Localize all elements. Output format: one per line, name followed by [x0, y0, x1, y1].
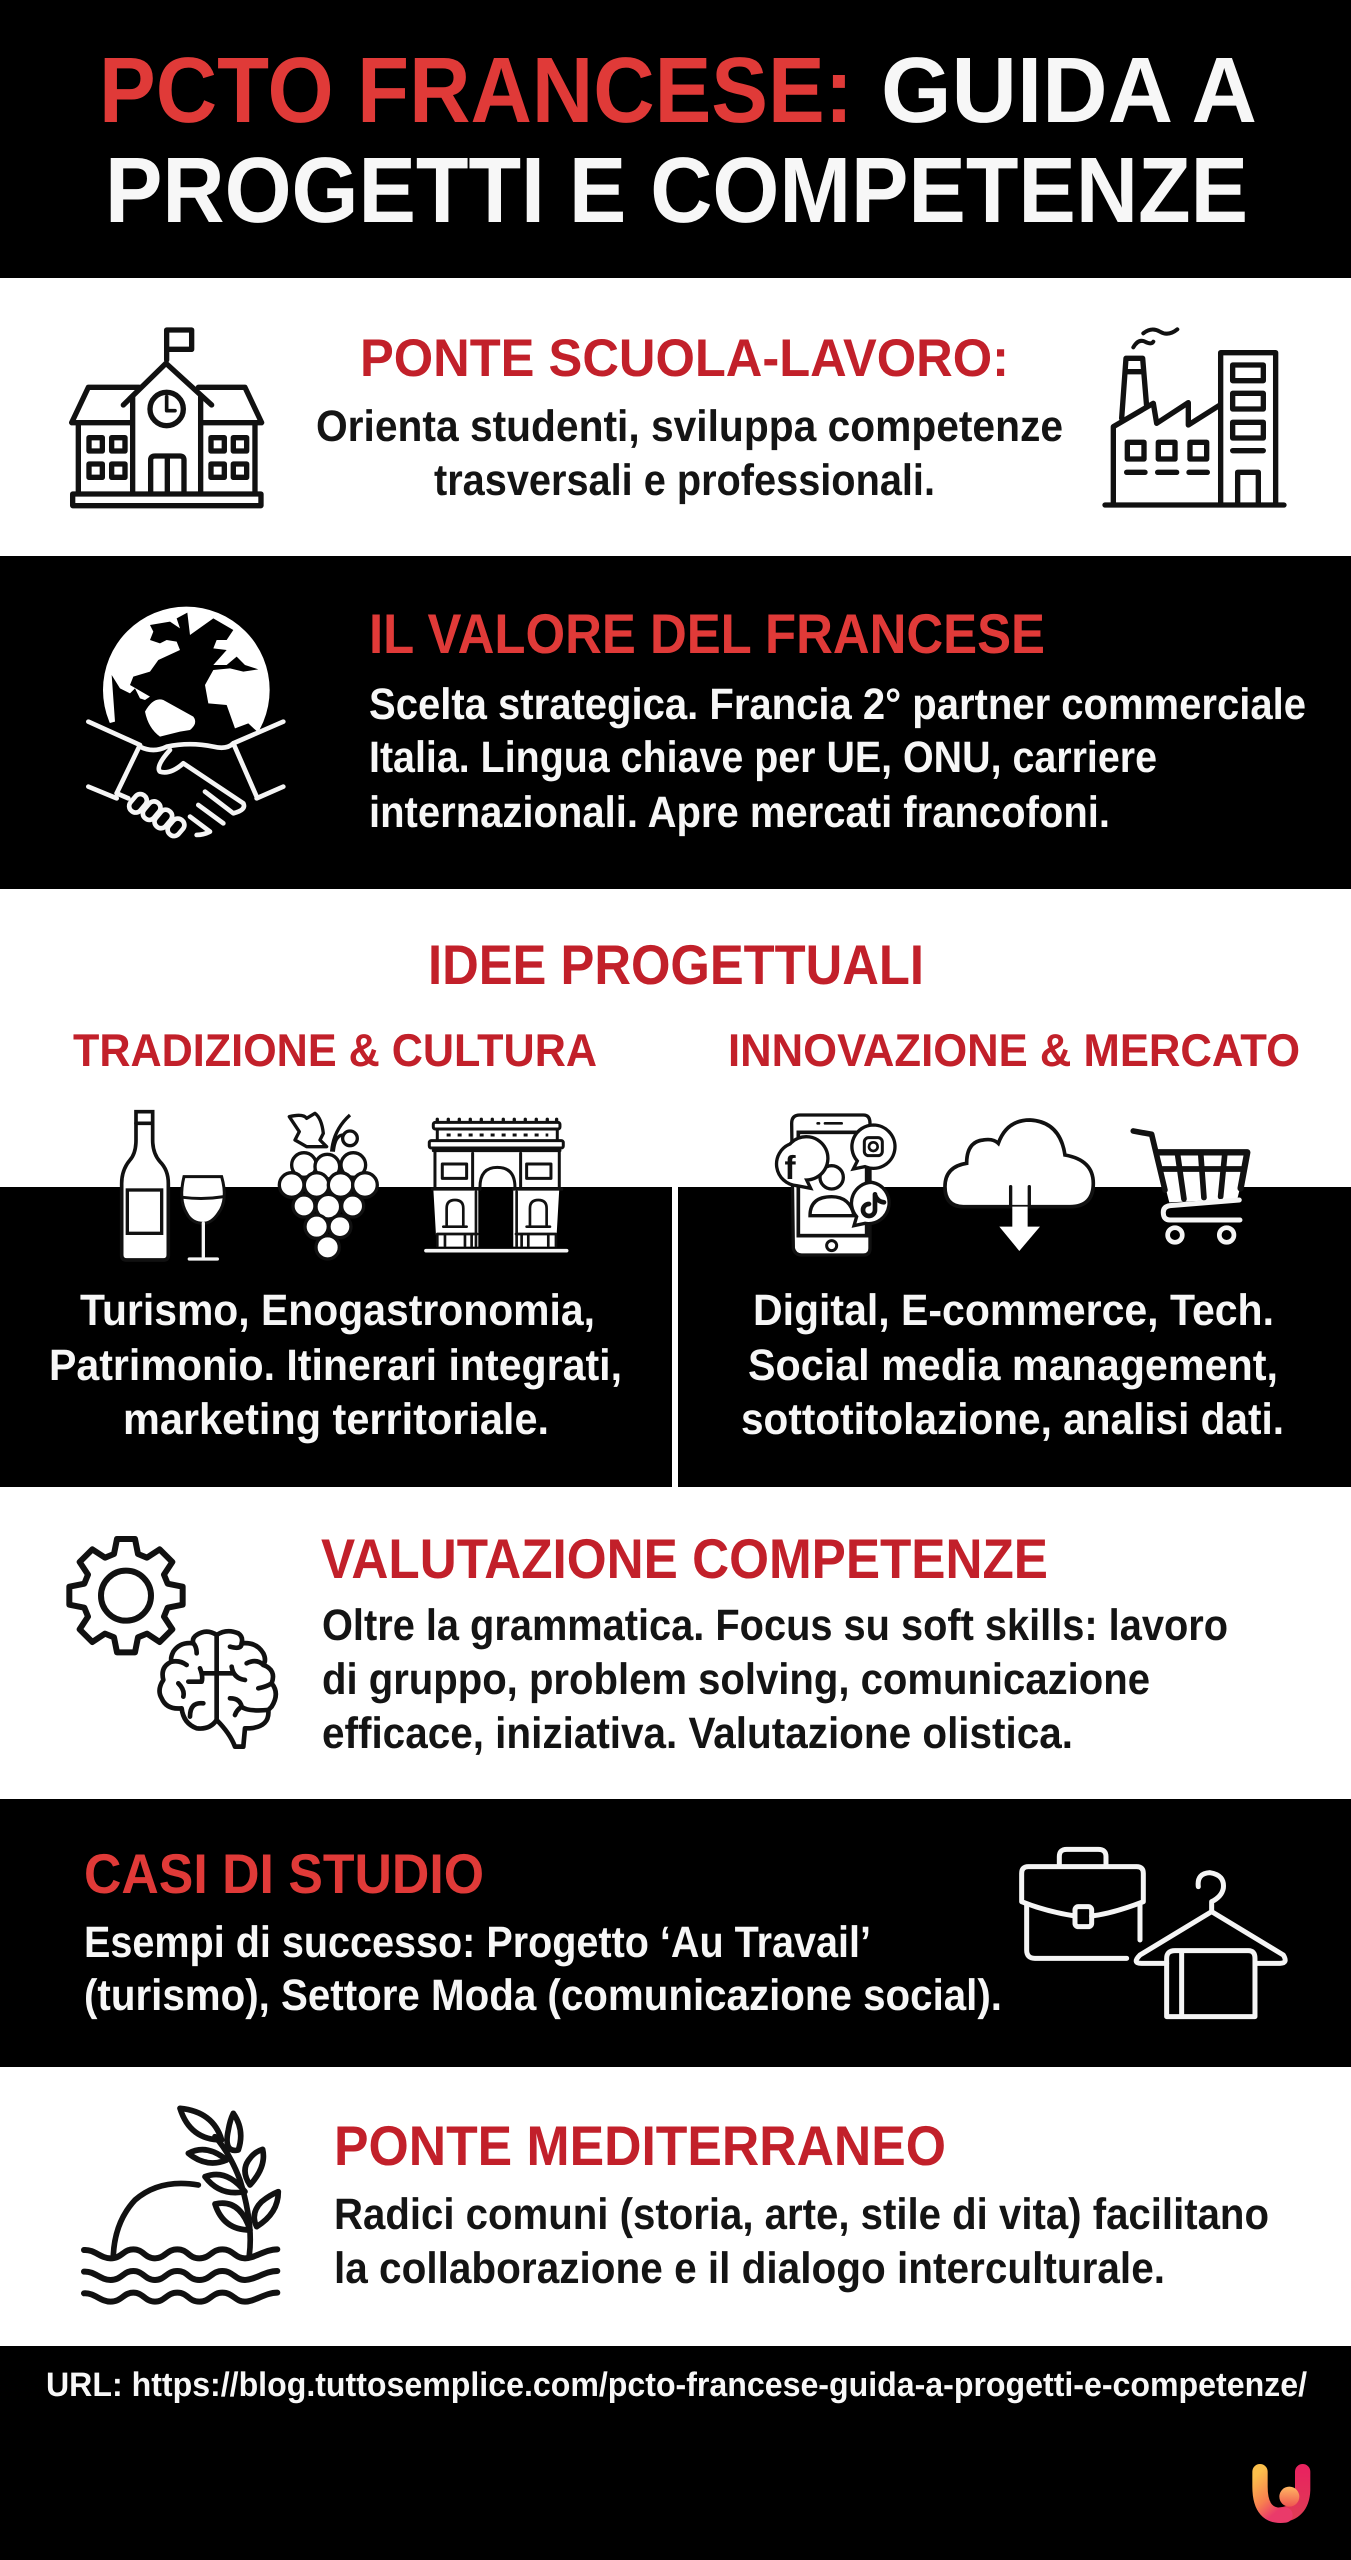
heading: il valore del francese: IL VALORE DEL FRANCESE [369, 602, 1045, 665]
icon: grapes [279, 1113, 377, 1259]
text: valutazione body: Oltre la grammatica. Focus su soft skills: lavoro [322, 1601, 1228, 1650]
text: innovazione body: Social media management, [748, 1341, 1278, 1390]
text: valutazione body [322, 1601, 1228, 1758]
subheading: tradizione e cultura: TRADIZIONE & CULTURA [73, 1024, 597, 1076]
heading: ponte mediterraneo: PONTE MEDITERRANEO [334, 2114, 946, 2177]
text: ponte body: trasversali e professionali. [434, 456, 935, 505]
icon: sun, olive branch and waves [84, 2108, 278, 2302]
icon: gear and brain [69, 1539, 276, 1747]
text: tradizione body: marketing territoriale. [123, 1395, 549, 1444]
panel: ponte scuola-lavoro [0, 278, 1351, 556]
text: ponte body: Orienta studenti, sviluppa competenze [316, 402, 1063, 451]
icon: school [72, 330, 262, 506]
text: mediterraneo body [334, 2190, 1269, 2293]
icon: phone with social bubbles [777, 1115, 895, 1255]
heading: valutazione competenze: VALUTAZIONE COMPETENZE [321, 1527, 1048, 1590]
text: ponte body [316, 402, 1063, 505]
subheading: innovazione e mercato: INNOVAZIONE & MERCATO [728, 1024, 1300, 1076]
text: innovazione body: Digital, E-commerce, Tech. [753, 1286, 1274, 1335]
panel: idee progettuali [0, 889, 1351, 1487]
text: valore body [369, 680, 1306, 837]
panel: il valore del francese [0, 556, 1351, 889]
title: PCTO FRANCESE: [99, 38, 853, 142]
panel: ponte mediterraneo [0, 2067, 1351, 2346]
heading: idee progettuali: IDEE PROGETTUALI [428, 933, 924, 996]
title: GUIDA A [881, 38, 1257, 142]
text: valutazione body: efficace, iniziativa. Valutazione olistica. [322, 1709, 1073, 1758]
text: mediterraneo body: la collaborazione e il dialogo interculturale. [334, 2244, 1165, 2293]
heading: ponte scuola-lavoro: PONTE SCUOLA-LAVORO: [360, 329, 1009, 388]
text: mediterraneo body: Radici comuni (storia, arte, stile di vita) facilitano [334, 2190, 1269, 2239]
panel: valutazione competenze [0, 1487, 1351, 1799]
text: innovazione body [741, 1286, 1284, 1444]
title: PROGETTI E COMPETENZE [105, 138, 1248, 242]
icon: arc de triomphe [426, 1119, 567, 1251]
icon: phone with social bubbles: f [784, 1149, 796, 1186]
text: source url: URL: https://blog.tuttosemplice.com/pcto-francese-guida-a-progetti-e-competenze/ [46, 2366, 1308, 2404]
panel: casi di studio [0, 1799, 1351, 2067]
text: valutazione body: di gruppo, problem solving, comunicazione [322, 1655, 1150, 1704]
panel: header [0, 0, 1351, 278]
text: tradizione body: Patrimonio. Itinerari integrati, [49, 1341, 622, 1390]
text: casi body: (turismo), Settore Moda (comunicazione social). [84, 1971, 1002, 2020]
icon: globe and handshake [88, 607, 283, 839]
text: casi body: Esempi di successo: Progetto ‘Au Travail’ [84, 1918, 871, 1967]
text: innovazione body: sottotitolazione, analisi dati. [741, 1395, 1284, 1444]
text: tradizione body: Turismo, Enogastronomia, [80, 1286, 595, 1335]
icon: cloud download [945, 1120, 1093, 1251]
icon: brand logo [1260, 2472, 1303, 2515]
text: tradizione body [49, 1286, 622, 1444]
icon: shopping cart [1133, 1131, 1247, 1242]
panel: footer [0, 2346, 1351, 2560]
icon: wine bottle and glass [122, 1112, 224, 1260]
text: valore body: Italia. Lingua chiave per UE, ONU, carriere [369, 733, 1157, 782]
icon: briefcase and hanger [1022, 1849, 1285, 2017]
heading: casi di studio: CASI DI STUDIO [84, 1842, 484, 1905]
text: valore body: internazionali. Apre mercati francofoni. [369, 788, 1110, 837]
text: casi body [84, 1918, 1002, 2020]
icon: factory [1105, 329, 1284, 505]
title [99, 38, 1257, 242]
